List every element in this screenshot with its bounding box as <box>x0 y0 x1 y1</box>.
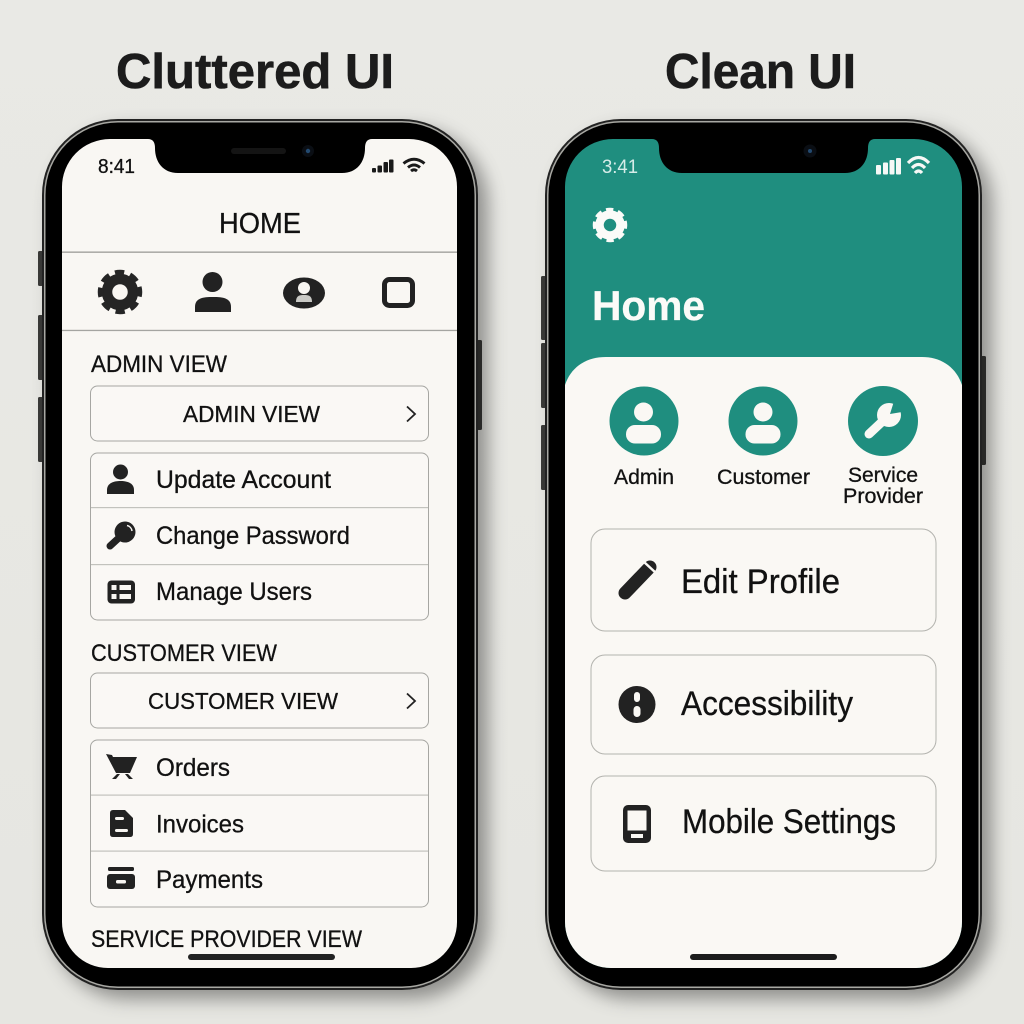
icon: person <box>195 272 231 312</box>
card: mobile settings: Mobile Settings <box>682 803 896 841</box>
row: invoices <box>110 810 244 838</box>
card: edit profile <box>591 529 936 631</box>
status bar <box>98 145 424 178</box>
row: change password: Change Password <box>156 522 350 550</box>
screen <box>565 139 962 968</box>
role: service provider: Provider <box>843 484 923 508</box>
icon: gear <box>100 272 140 312</box>
row: update account: Update Account <box>156 466 331 494</box>
row: manage users: Manage Users <box>156 578 312 606</box>
header: Home: Home <box>592 282 705 329</box>
list: customer actions <box>90 740 428 907</box>
icon: signal <box>372 160 394 172</box>
role: customer <box>717 386 810 489</box>
role: admin: Admin <box>614 465 674 489</box>
role: admin <box>610 386 678 489</box>
phone: clean UI <box>541 119 986 990</box>
card: accessibility <box>591 655 936 754</box>
side buttons <box>541 276 986 490</box>
button: customer view <box>90 673 428 728</box>
icon: wifi <box>908 158 929 173</box>
camera <box>804 144 816 158</box>
status bar <box>602 144 929 178</box>
row: orders <box>106 754 230 782</box>
row: payments <box>107 866 263 894</box>
role: service provider <box>843 386 923 508</box>
home indicator <box>690 954 837 960</box>
card: mobile settings <box>591 776 936 871</box>
content panel <box>565 357 962 968</box>
section heading: service provider view: SERVICE PROVIDER VIEW <box>91 926 362 953</box>
icon: gear <box>595 210 625 240</box>
title: clean UI: Clean UI <box>665 45 856 99</box>
phone frame <box>545 119 982 990</box>
button: admin view: ADMIN VIEW <box>183 401 320 427</box>
row: payments: Payments <box>156 866 263 894</box>
row: invoices: Invoices <box>156 810 244 838</box>
phone: cluttered UI <box>38 119 482 990</box>
phone frame <box>42 119 478 990</box>
speaker and camera <box>231 145 314 157</box>
home indicator <box>188 954 335 960</box>
role: service provider: Service <box>848 463 918 487</box>
icon: signal <box>876 158 901 174</box>
icon row <box>100 272 412 312</box>
time: 3:41 <box>602 156 638 178</box>
section heading: customer view: CUSTOMER VIEW <box>91 640 277 667</box>
time: 8:41 <box>98 156 135 178</box>
title: cluttered UI: Cluttered UI <box>116 45 394 99</box>
list: admin actions <box>90 453 428 620</box>
row: orders: Orders <box>156 754 230 782</box>
header: HOME: HOME <box>219 208 301 240</box>
side buttons <box>38 251 482 462</box>
screen <box>62 139 457 968</box>
button: customer view: CUSTOMER VIEW <box>148 688 338 714</box>
icon: eye with person <box>283 278 325 308</box>
section heading: admin view: ADMIN VIEW <box>91 351 227 378</box>
icon: wifi <box>404 159 424 171</box>
card: accessibility: Accessibility <box>681 685 853 723</box>
icon: square <box>384 280 412 306</box>
button: admin view <box>90 386 428 441</box>
role: customer: Customer <box>717 465 810 489</box>
card: edit profile: Edit Profile <box>681 563 840 601</box>
